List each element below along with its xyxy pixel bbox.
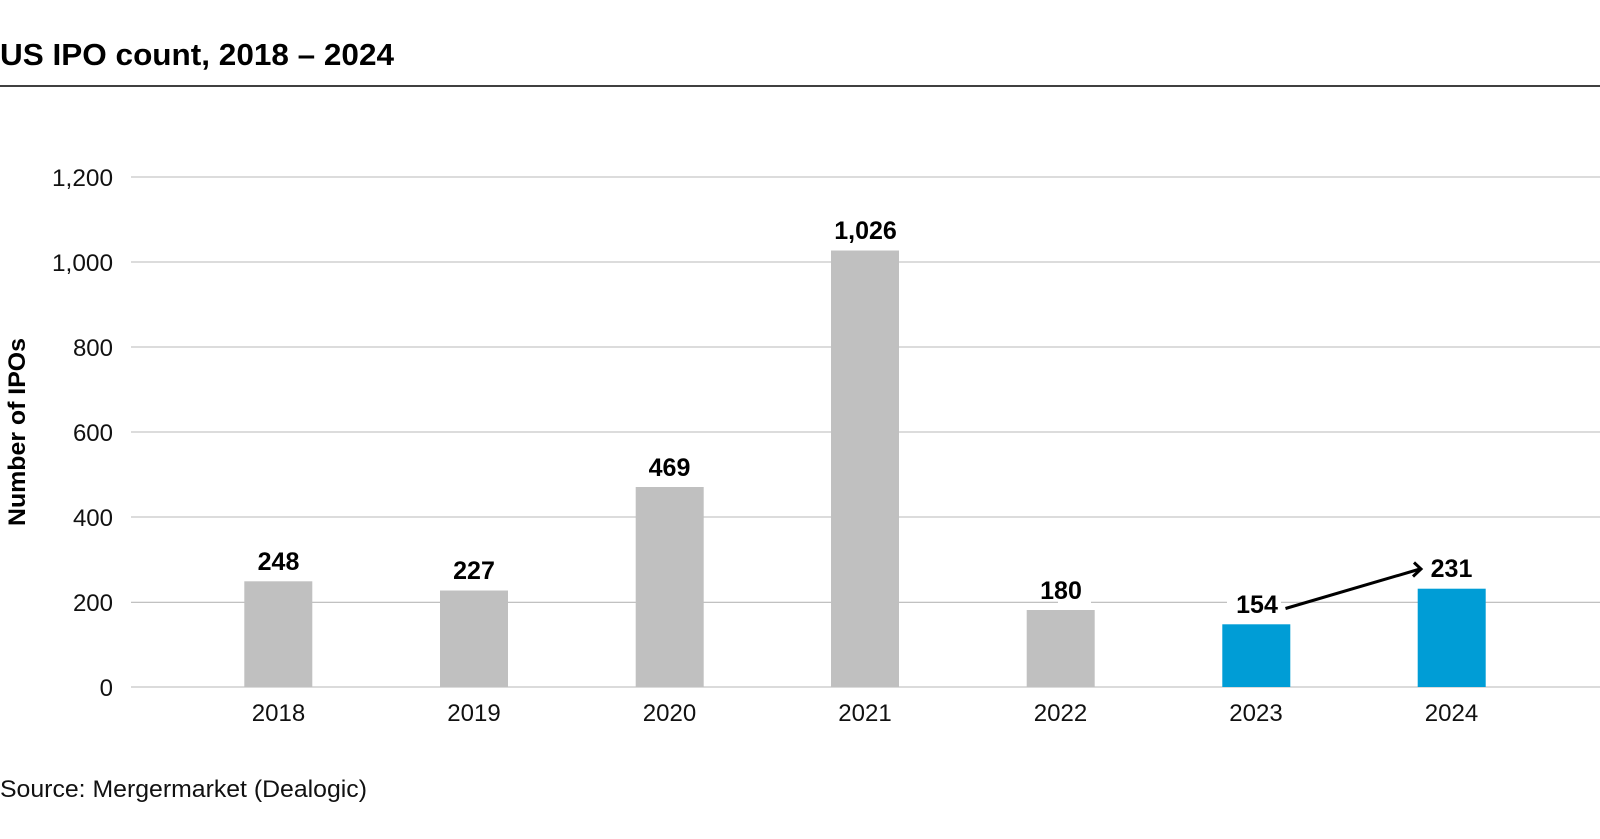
value labels: 1,026 [834,217,897,245]
value labels: 231 [1431,555,1472,583]
y-axis tick labels [52,165,113,702]
bar: 2024 [1418,589,1486,687]
source note: Source: Mergermarket (Dealogic) [0,776,367,803]
bar chart [244,250,1486,687]
x-axis labels: 2021 [838,700,892,727]
x-axis labels: 2023 [1229,700,1283,727]
y-axis tick labels: 200 [73,590,113,617]
x-axis labels [252,700,1478,727]
value labels: 248 [258,548,299,576]
x-axis labels: 2024 [1425,700,1478,727]
label masks over gridline [1058,580,1091,604]
value labels: 180 [1040,577,1082,605]
bar: 2023 [1222,624,1290,687]
bar: 2022 [1027,610,1095,687]
value labels [258,217,1472,619]
x-axis labels: 2022 [1034,700,1087,727]
y-axis tick labels: 0 [100,675,113,702]
y-axis title: Number of IPOs [4,338,31,526]
y-axis tick labels: 1,200 [52,165,113,192]
bar: 2019 [440,590,508,687]
gridlines [131,177,1600,687]
bar: 2021 [831,250,899,687]
x-axis labels: 2018 [252,700,305,727]
y-axis tick labels: 800 [73,335,113,362]
x-axis labels: 2020 [643,700,696,727]
y-axis tick labels: 600 [73,420,113,447]
arrow: 2023 to 2024 [1286,562,1421,608]
value labels: 469 [649,454,690,482]
x-axis labels: 2019 [447,700,501,727]
value labels: 154 [1236,591,1278,619]
title: US IPO count, 2018 – 2024 [0,38,394,72]
bar: 2020 [636,487,704,687]
y-axis tick labels: 400 [73,505,113,532]
y-axis tick labels: 1,000 [52,250,113,277]
value labels: 227 [453,557,495,585]
bar: 2018 [244,581,312,687]
